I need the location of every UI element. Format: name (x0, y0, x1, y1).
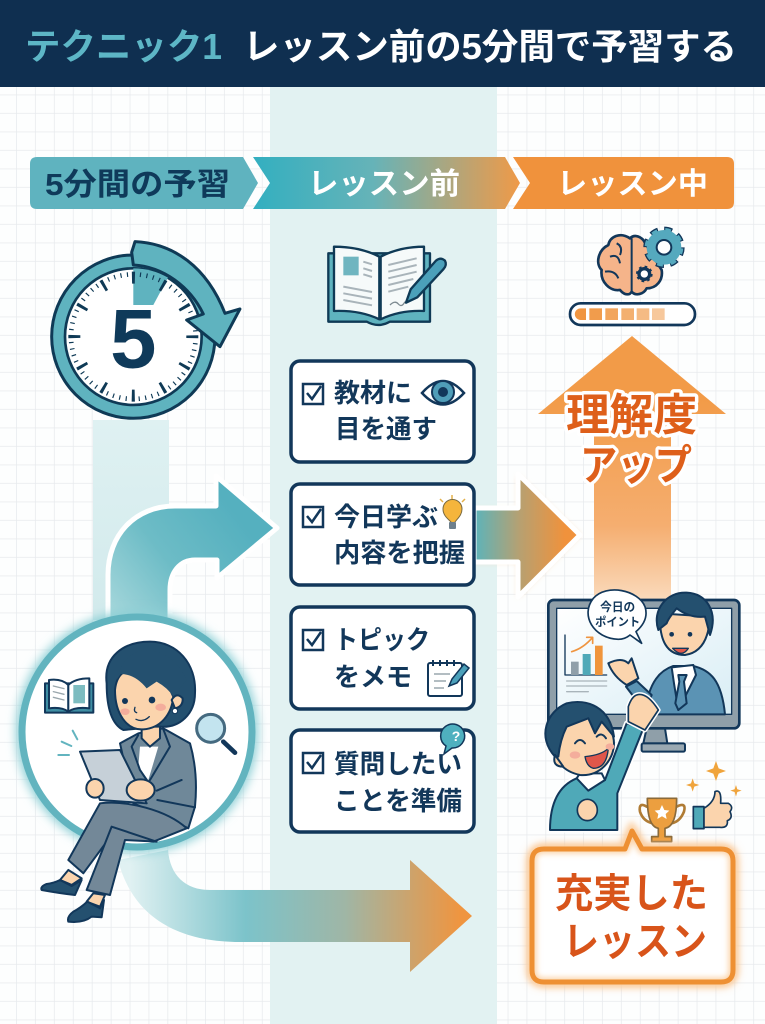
neck (142, 727, 160, 747)
icon: open book (45, 678, 93, 713)
arrow: gradient arrow from lesson prep to understanding (474, 474, 580, 597)
icon: trophy (640, 798, 685, 842)
student (545, 694, 658, 830)
leg back (68, 803, 187, 873)
leg front (87, 827, 157, 895)
arrow: curved teal arrow from person to lesson (108, 476, 277, 620)
icon: 5 minute timer (52, 242, 240, 418)
illustration: teacher on monitor and happy student (545, 590, 742, 842)
panel: checklist card 2 (291, 484, 474, 585)
large gear (647, 231, 681, 264)
brain (598, 235, 662, 294)
title: main heading: レッスン前の5分間で予習する (243, 26, 737, 67)
speech bubble: ポイント (595, 616, 640, 629)
circle frame (22, 617, 252, 847)
callout text: 充実した (555, 872, 708, 916)
header bar (0, 0, 765, 87)
sparks (58, 731, 77, 755)
arrow: understanding up arrow (538, 336, 726, 610)
hands (86, 779, 104, 798)
shirt (138, 747, 158, 780)
panel: checklist card 3 (291, 607, 474, 709)
icon: open book and pen (328, 247, 446, 325)
arrow: curved arrow along the bottom (118, 850, 472, 972)
icon: checkbox (303, 630, 323, 650)
panel: checklist card 4 (291, 724, 474, 832)
icon: checkbox (303, 753, 323, 773)
illustration: woman reading a tablet in a circle (16, 611, 258, 922)
teacher (608, 593, 725, 714)
icon: magnifier (197, 714, 235, 753)
jacket (120, 728, 196, 828)
circle glow (16, 611, 258, 853)
title: technique number: テクニック1 (25, 26, 222, 67)
speech bubble: 今日の (600, 600, 635, 614)
callout: 充実したレッスン (532, 831, 733, 982)
text: 内容を把握 (334, 538, 465, 568)
icon: checkbox (303, 384, 323, 404)
icon: question bubble: ? (452, 728, 460, 744)
text: 理解度: 理解度 (566, 391, 697, 440)
speech bubble (588, 590, 646, 643)
icon: 5 minute timer: 5 (110, 292, 156, 385)
icon: question bubble (441, 724, 465, 754)
panel: checklist card 1 (291, 361, 474, 462)
ankles (60, 870, 105, 907)
text: ことを準備 (334, 786, 462, 816)
strip below timer (93, 420, 169, 620)
text: をメモ (334, 662, 412, 692)
callout text: レッスン (563, 920, 707, 964)
hair back (106, 642, 195, 730)
text: 教材に (334, 378, 412, 408)
icon: checkbox (303, 507, 323, 527)
text: 目を通す (335, 414, 437, 444)
face (115, 670, 173, 729)
icon: eye (422, 381, 464, 404)
text: トピック (334, 625, 430, 655)
step: 5分間の予習: 5分間の予習 (45, 167, 230, 202)
step: レッスン前 (253, 157, 520, 209)
icon: thumbs up (693, 791, 732, 829)
chart on screen (565, 635, 607, 692)
text: 今日学ぶ (334, 502, 438, 532)
text: 質問したい (334, 749, 462, 779)
icon: notepad and pen (428, 660, 469, 696)
sparkles (686, 761, 742, 797)
step: レッスン前: レッスン前 (308, 168, 460, 201)
icon: light bulb (440, 495, 465, 529)
small gear (637, 267, 652, 281)
step: レッスン中: レッスン中 (557, 168, 708, 201)
middle column band (270, 87, 497, 1024)
tablet (80, 750, 147, 803)
text: アップ: アップ (580, 442, 692, 489)
step: 5分間の予習 (30, 157, 258, 209)
monitor (548, 600, 739, 752)
icon: brain and gears with progress bar (570, 231, 695, 325)
shoes (41, 880, 104, 922)
progress bar (570, 303, 695, 325)
step: レッスン中 (513, 157, 734, 209)
